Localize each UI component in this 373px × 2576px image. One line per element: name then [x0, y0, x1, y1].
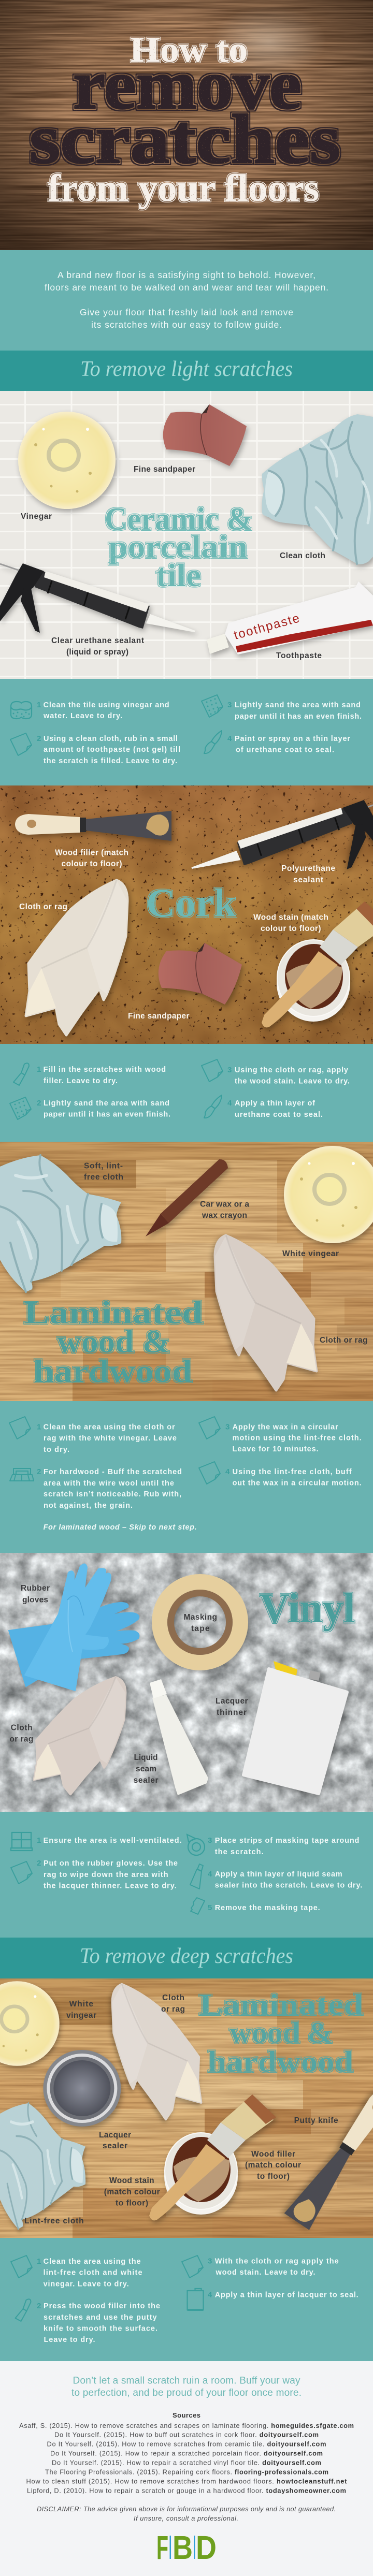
label: cloth or rag: Cloth — [11, 1724, 33, 1733]
label: masking tape: Masking — [183, 1613, 217, 1622]
title — [30, 30, 340, 210]
label: car wax — [200, 1200, 249, 1220]
step 3: paper until it has an even finish. — [235, 712, 362, 721]
title: ceramic and porcelain tile: tile — [156, 558, 201, 593]
step 4: Apply a thin layer of liquid seam — [215, 1870, 342, 1879]
step 4: Apply a thin layer of lacquer to seal. — [215, 2291, 358, 2300]
step 2: Leave to dry. — [44, 2336, 95, 2344]
step 2: area with the wire wool until the — [44, 1479, 174, 1488]
step 2: 2 — [37, 1859, 41, 1868]
step 3: 3 — [208, 2257, 212, 2266]
seam sealer tube — [150, 1679, 208, 1795]
disclaimer: DISCLAIMER: The advice given above is for informational purposes only and is not guaranteed. — [37, 2505, 336, 2513]
sources: Lipford, D. (2010). How to repair a scratch or gouge in a hardwood floor. todayshomeowner.com — [27, 2486, 346, 2495]
label: white vinegar: vingear — [66, 2011, 96, 2020]
step 1: 1 — [37, 2257, 41, 2266]
icon: cloth — [199, 1417, 220, 1439]
icon: tape strip — [191, 1898, 205, 1914]
step 2: Using a clean cloth, rub in a small — [44, 735, 178, 743]
vinegar — [284, 1146, 373, 1243]
label: white vinegar — [66, 2000, 96, 2020]
label: car wax: wax crayon — [202, 1211, 247, 1220]
title: laminated wood and hardwood: wood & — [229, 2016, 333, 2049]
heading: light scratches: To remove light scratches — [80, 357, 293, 381]
step 3: the scratch. — [215, 1848, 264, 1856]
rag — [34, 1677, 125, 1794]
step 1 — [37, 701, 169, 720]
icon: brush — [204, 1095, 222, 1118]
cork background — [0, 785, 373, 1044]
step 1: 1 — [37, 1065, 41, 1074]
step 2: amount of toothpaste (not gel) till — [44, 746, 180, 754]
step 1: filler. Leave to dry. — [44, 1077, 118, 1085]
panel: intro: floors are meant to be walked on and wear and tear will happen. — [45, 282, 328, 293]
label: rubber gloves: Rubber — [21, 1584, 50, 1593]
sources: Do It Yourself. (2015). How to repair a scratched vinyl floor tile. doityourself.com — [52, 2458, 321, 2466]
title: laminated wood and hardwood: hardwood — [34, 1354, 192, 1389]
step 3: motion using the lint-free cloth. — [233, 1434, 362, 1443]
label: liquid seam sealer: sealer — [134, 1776, 159, 1785]
label: lint-free cloth: Lint-free cloth — [24, 2217, 84, 2225]
step 4: 4 — [227, 1099, 232, 1108]
label: car wax: Car wax or a — [200, 1200, 249, 1209]
step 4: 4 — [208, 1870, 212, 1879]
vinegar — [0, 1981, 60, 2066]
label: lacquer thinner: Lacquer — [216, 1697, 248, 1706]
icon: cloth — [11, 2255, 32, 2278]
lacquer lid — [43, 2050, 121, 2127]
step 2 — [37, 1467, 197, 1532]
closing message: to perfection, and be proud of your floor once more. — [71, 2388, 302, 2398]
label: wood filler — [55, 848, 128, 868]
panel: vinyl — [0, 1553, 373, 1812]
step 1: 1 — [37, 1423, 41, 1431]
step 2: Lightly sand the area with sand — [44, 1099, 169, 1108]
step 3: Lightly sand the area with sand — [235, 701, 361, 709]
label: masking tape — [183, 1613, 217, 1633]
title: ceramic and porcelain tile: Ceramic & — [105, 502, 253, 537]
vinegar — [18, 412, 116, 509]
cloth — [0, 1155, 121, 1292]
step 1: Clean the area using the — [44, 2258, 141, 2266]
icon: tube — [190, 1864, 203, 1889]
title: laminated wood and hardwood: Laminated — [24, 1296, 203, 1331]
title: cork: Cork — [146, 880, 237, 925]
step 2: 2 — [37, 1099, 41, 1108]
toothpaste — [207, 581, 373, 654]
lacquer thinner can — [243, 1661, 347, 1794]
panel: deep steps — [0, 2238, 373, 2361]
step 1: Clean the tile using vinegar and — [44, 701, 169, 709]
label: wood filler — [245, 2150, 301, 2181]
label: wood filler: to floor) — [257, 2172, 290, 2181]
panel: ceramic and porcelain tile — [0, 391, 373, 679]
label: wood stain: to floor) — [116, 2199, 148, 2207]
step 2: Put on the rubber gloves. Use the — [44, 1859, 178, 1868]
wood background — [0, 1978, 373, 2238]
label: liquid seam sealer: Liquid — [134, 1753, 157, 1762]
step 3: With the cloth or rag apply the — [215, 2258, 339, 2266]
icon: cloth — [182, 2255, 203, 2278]
label: fine sandpaper: Fine sandpaper — [134, 465, 195, 474]
icon: masking tape — [187, 1835, 205, 1855]
step 1: rag with the white vinegar. Leave — [44, 1434, 177, 1443]
step 4: Using the lint-free cloth, buff — [233, 1468, 352, 1476]
label: polyurethane sealant — [281, 864, 335, 884]
panel: header — [0, 0, 373, 250]
label: wood stain: (match colour — [104, 2188, 160, 2196]
cloth — [0, 2103, 85, 2229]
step 2: not against, the grain. — [44, 1502, 133, 1510]
label: wood filler: colour to floor) — [61, 860, 122, 868]
icon: cloth — [11, 1861, 32, 1884]
label: clean cloth: Clean cloth — [280, 551, 325, 560]
step 2: 2 — [37, 734, 41, 743]
step 2: 2 — [37, 1467, 41, 1476]
step 1: lint-free cloth and white — [44, 2269, 142, 2277]
label: wood filler: Wood filler (match — [55, 848, 128, 857]
panel: intro: A brand new floor is a satisfying sight to behold. However, — [58, 270, 315, 280]
label: wood filler: Wood filler — [251, 2150, 295, 2159]
icon: scrub brush — [10, 1468, 34, 1481]
step 2: For hardwood - Buff the scratched — [44, 1468, 182, 1476]
step 2: Press the wood filler into the — [44, 2302, 160, 2310]
label: wood stain: colour to floor) — [261, 924, 321, 933]
label: wood filler: (match colour — [245, 2161, 301, 2170]
panel: footer — [0, 2361, 373, 2576]
step 4 — [227, 734, 350, 754]
title: laminated wood and hardwood: Laminated — [199, 1988, 363, 2021]
logo: FBD: F — [156, 2529, 168, 2566]
masking tape — [160, 1582, 240, 1663]
icon: cloth — [202, 1059, 223, 1082]
label: cloth or rag — [161, 1993, 185, 2014]
step 4: out the wax in a circular motion. — [233, 1479, 362, 1487]
label: soft lint-free cloth: free cloth — [84, 1173, 123, 1182]
step 2: 2 — [37, 2302, 41, 2310]
title: laminated wood and hardwood — [199, 1988, 363, 2078]
step 2: the scratch is filled. Leave to dry. — [44, 757, 177, 765]
icon: cloth — [199, 1462, 220, 1484]
step 2: rag to wipe down the area with — [44, 1871, 168, 1879]
step 4: 4 — [208, 2291, 212, 2300]
step 3: 3 — [227, 1066, 232, 1074]
icon: window — [11, 1832, 32, 1851]
title: laminated wood and hardwood — [24, 1296, 203, 1389]
label: soft lint-free cloth: Soft, lint- — [84, 1162, 123, 1170]
step 2: For laminated wood – Skip to next step. — [44, 1523, 197, 1532]
title: How to — [131, 30, 248, 70]
icon: knife — [13, 1063, 29, 1085]
step 3: Leave for 10 minutes. — [233, 1445, 319, 1453]
step 3 — [227, 1066, 350, 1085]
icon: sandpaper — [10, 1097, 31, 1119]
panel: cork — [0, 785, 373, 1044]
sources: Asaff, S. (2015). How to remove scratches and scrapes on laminate flooring. homeguides.sfgate.com — [19, 2422, 354, 2429]
step 3 — [227, 701, 362, 721]
label: wood stain — [253, 913, 328, 933]
title: laminated wood and hardwood: hardwood — [208, 2045, 353, 2078]
label: cloth or rag: Cloth or rag — [320, 1336, 368, 1345]
panel: intro — [0, 250, 373, 351]
closing message: Don’t let a small scratch ruin a room. Buff your way — [73, 2376, 300, 2386]
label: cloth or rag: or rag — [161, 2005, 185, 2014]
title: from your floors — [48, 167, 319, 210]
putty knife — [15, 811, 171, 841]
step 2: paper until it has an even finish. — [44, 1110, 170, 1118]
step 4: of urethane coat to seal. — [236, 746, 334, 754]
step 4: urethane coat to seal. — [235, 1111, 323, 1119]
step 2: scratch isn’t noticeable. Rub with, — [44, 1490, 181, 1498]
icon: sandpaper — [202, 695, 223, 717]
sources: The Flooring Professionals. (2015). Repairing cork floors. flooring-professionals.com — [45, 2468, 328, 2476]
step 2: knife to smooth the surface. — [44, 2324, 157, 2333]
caulk gun — [192, 800, 373, 869]
step 2: the lacquer thinner. Leave to dry. — [44, 1882, 177, 1890]
step 5: 5 — [208, 1903, 212, 1912]
panel: wood steps — [0, 1401, 373, 1553]
label: masking tape: tape — [191, 1624, 210, 1633]
step 2 — [37, 1859, 178, 1890]
step 4 — [208, 1870, 362, 1890]
caulk gun — [0, 563, 195, 633]
step 4 — [225, 1467, 362, 1487]
step 3: Apply the wax in a circular — [233, 1423, 338, 1431]
step 1: vinegar. Leave to dry. — [44, 2280, 129, 2289]
step 2 — [37, 734, 180, 765]
label: wood stain: Wood stain — [109, 2176, 154, 2185]
step 3: Place strips of masking tape around — [215, 1837, 359, 1845]
label: cloth or rag: Cloth or rag — [19, 903, 67, 911]
icon: sponge — [11, 702, 32, 719]
sandpaper — [159, 943, 242, 1005]
step 3 — [225, 1423, 362, 1453]
label: lacquer thinner — [216, 1697, 248, 1717]
step 1: to dry. — [44, 1446, 69, 1454]
label: sealant — [51, 636, 144, 657]
label: white vinegar: White vingear — [282, 1249, 339, 1258]
wax crayon — [146, 1159, 228, 1236]
panel: tile steps — [0, 679, 373, 785]
panel: laminated wood and hardwood, deep — [0, 1978, 373, 2238]
title: vinyl: Vinyl — [260, 1584, 355, 1632]
label: liquid seam sealer: seam — [136, 1765, 156, 1773]
heading: deep scratches: To remove deep scratches — [80, 1944, 293, 1968]
paint can and brush — [262, 901, 373, 1027]
label: liquid seam sealer — [134, 1753, 159, 1785]
logo: FBD: B — [173, 2529, 193, 2566]
label: vinegar: Vinegar — [21, 512, 52, 521]
panel: intro: Give your floor that freshly laid look and remove — [80, 307, 293, 317]
step 3: the wood stain. Leave to dry. — [235, 1077, 350, 1085]
disclaimer — [37, 2505, 336, 2522]
label: sealant: (liquid or spray) — [66, 648, 128, 657]
title: scratches — [30, 101, 340, 178]
step 3: Using the cloth or rag, apply — [235, 1066, 348, 1074]
label: lacquer thinner: thinner — [217, 1708, 247, 1717]
step 3: wood stain. Leave to dry. — [216, 2268, 315, 2277]
title: ceramic and porcelain tile: porcelain — [108, 530, 248, 565]
label: rubber gloves: gloves — [22, 1596, 48, 1604]
wood background — [0, 0, 373, 250]
label: lacquer sealer: Lacquer — [99, 2131, 131, 2140]
label: putty knife: Putty knife — [294, 2116, 338, 2125]
label: soft lint-free cloth — [84, 1162, 123, 1182]
icon: cloth — [9, 1417, 31, 1439]
panel: cork steps — [0, 1044, 373, 1142]
step 4: 4 — [227, 734, 232, 743]
step 1 — [37, 2257, 142, 2289]
label: cloth or rag: Cloth — [162, 1993, 184, 2002]
label: polyurethane sealant: Polyurethane — [281, 864, 335, 873]
panel: vinyl steps — [0, 1812, 373, 1938]
step 3 — [208, 1836, 359, 1856]
step 1: 1 — [37, 1836, 41, 1845]
step 4: Paint or spray on a thin layer — [235, 735, 350, 743]
label: lacquer sealer: sealer — [103, 2142, 127, 2150]
paint can and brush — [149, 2094, 276, 2220]
step 1: Clean the area using the cloth or — [44, 1423, 175, 1431]
label: wood stain: Wood stain (match — [253, 913, 328, 922]
step 1: Ensure the area is well-ventilated. — [44, 1837, 182, 1845]
heading: deep scratches — [0, 1938, 373, 1978]
rag — [26, 880, 127, 1035]
step 5: Remove the masking tape. — [215, 1904, 320, 1912]
sources: How to clean stuff (2015). How to remove scratches from hardwood floors. howtocleanstuff.net — [26, 2478, 347, 2485]
step 2 — [37, 1099, 170, 1118]
label: white vinegar: White — [69, 2000, 93, 2009]
icon: knife — [16, 2299, 31, 2321]
step 1 — [37, 1423, 177, 1454]
panel: intro: its scratches with our easy to follow guide. — [91, 319, 282, 330]
wood background — [0, 1142, 373, 1401]
heading: light scratches — [0, 351, 373, 391]
label: cloth or rag — [9, 1724, 33, 1743]
rag — [215, 1235, 317, 1390]
label: sealant: Clear urethane sealant — [51, 636, 144, 645]
step 1: Fill in the scratches with wood — [44, 1066, 166, 1074]
sandpaper — [163, 404, 247, 466]
title: laminated wood and hardwood: wood & — [57, 1325, 170, 1360]
label: toothpaste: Toothpaste — [276, 651, 322, 660]
toothpaste: toothpaste — [232, 611, 301, 643]
title: remove — [73, 47, 302, 124]
step 3: 3 — [225, 1423, 229, 1431]
sources — [19, 2411, 354, 2495]
step 4: 4 — [225, 1467, 230, 1476]
step 1 — [37, 1065, 166, 1085]
cloth — [262, 414, 373, 564]
label: rubber gloves — [21, 1584, 50, 1604]
label: cloth or rag: or rag — [9, 1735, 33, 1743]
rag — [112, 1984, 201, 2119]
step 4: Apply a thin layer of — [235, 1099, 315, 1108]
step 1: water. Leave to dry. — [43, 712, 122, 720]
icon: cloth — [10, 733, 32, 755]
step 3: 3 — [208, 1836, 212, 1845]
granite background — [0, 1553, 373, 1812]
sources: Do It Yourself. (2015). How to remove scratches from ceramic tile. doityourself.com — [47, 2440, 326, 2448]
label: polyurethane sealant: sealant — [293, 876, 323, 884]
step 2 — [37, 2302, 160, 2344]
icon: brush — [204, 731, 222, 753]
step 4 — [227, 1099, 323, 1119]
logo: FBD — [156, 2529, 217, 2566]
putty knife — [284, 2084, 373, 2230]
step 4: sealer into the scratch. Leave to dry. — [215, 1882, 362, 1890]
title: ceramic and porcelain tile — [105, 502, 253, 593]
sources: Do It Yourself. (2015). How to repair a scratched porcelain floor. doityourself.com — [50, 2449, 323, 2457]
closing message — [71, 2376, 302, 2398]
label: wood stain — [104, 2176, 160, 2207]
sources: Do It Yourself. (2015). How to buff out scratches in cork floor. doityourself.com — [54, 2431, 319, 2439]
sources: Sources — [173, 2411, 200, 2419]
disclaimer: If unsure, consult a professional. — [134, 2514, 238, 2522]
logo: FBD: D — [196, 2529, 217, 2566]
step 3 — [208, 2257, 339, 2277]
icon: lacquer can — [188, 2289, 203, 2310]
step 2: scratches and use the putty — [44, 2313, 157, 2322]
rubber gloves — [9, 1564, 139, 1691]
step 1: 1 — [37, 701, 41, 709]
label: lacquer sealer — [99, 2131, 131, 2150]
step 3: 3 — [227, 701, 232, 709]
label: fine sandpaper: Fine sandpaper — [128, 1012, 190, 1021]
panel: laminated wood and hardwood — [0, 1142, 373, 1401]
tile background — [0, 391, 373, 679]
